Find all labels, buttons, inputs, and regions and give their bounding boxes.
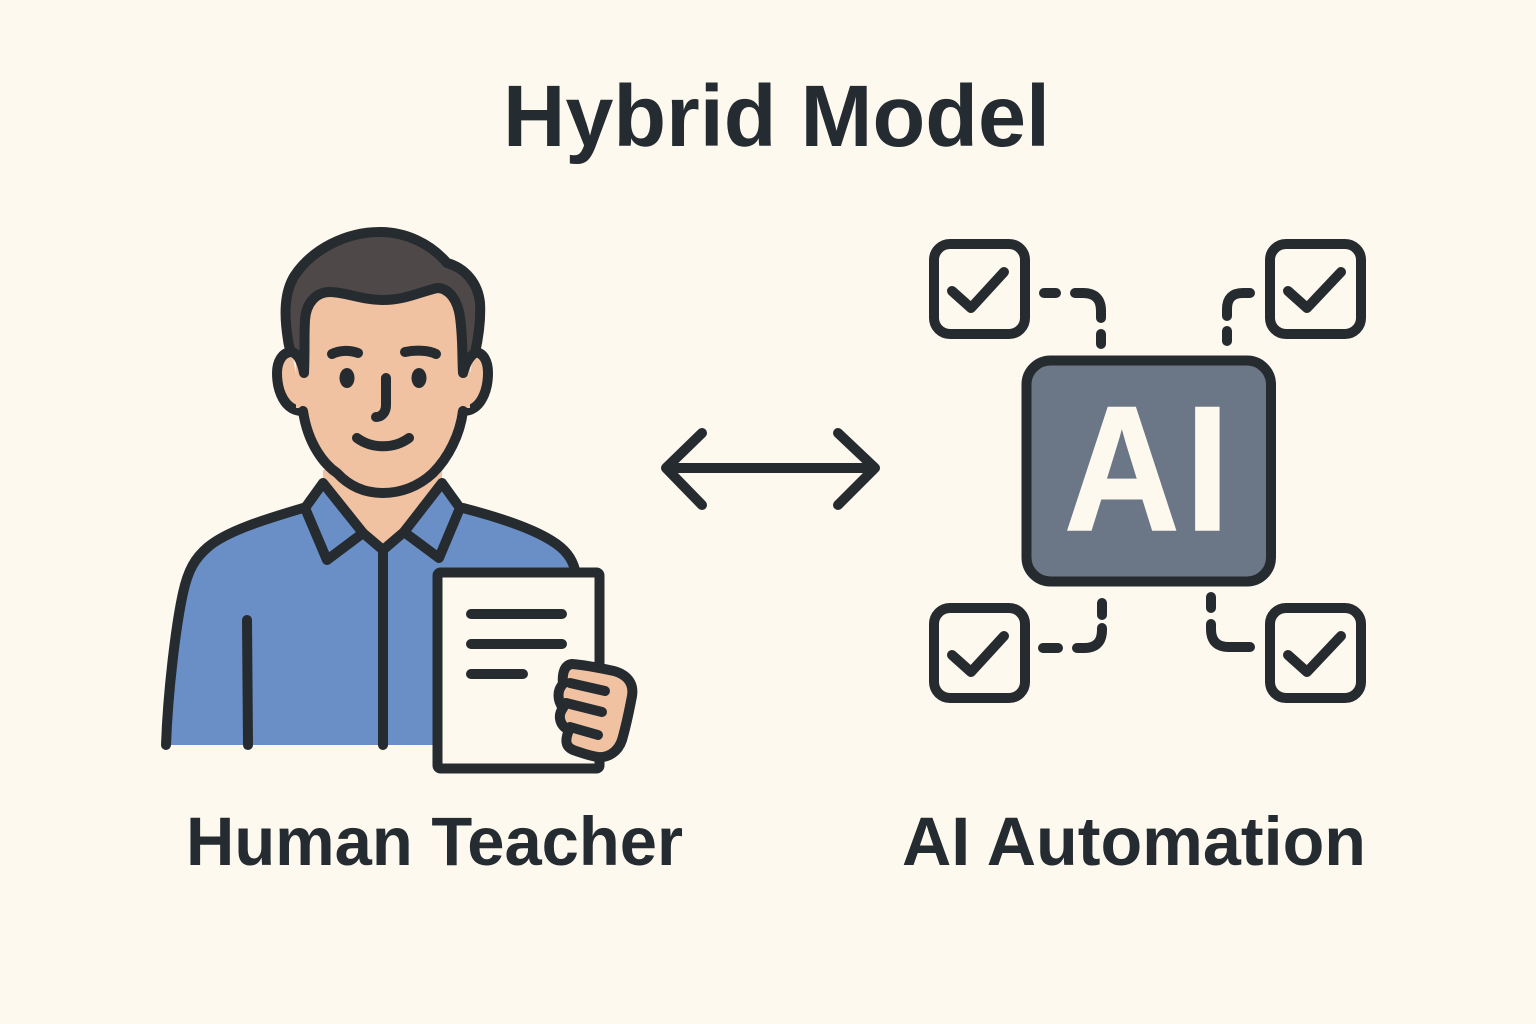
icon: human teacher: [166, 232, 632, 768]
hand: [558, 664, 632, 757]
left ear: [277, 352, 303, 411]
finger line 3: [570, 727, 598, 735]
mouth: [357, 438, 409, 446]
label: human teacher: Human Teacher: [186, 803, 683, 880]
face skin: [296, 288, 470, 493]
jaw line: [303, 411, 463, 493]
paper text line 3: [471, 669, 523, 679]
left eyebrow: [332, 351, 358, 354]
AI chip: [1026, 360, 1271, 582]
label: AI automation: AI Automation: [902, 803, 1366, 880]
connector top left: [1044, 293, 1101, 344]
checkbox bottom right: [1270, 608, 1361, 698]
checkbox top left: [934, 244, 1025, 334]
paper text line 2: [471, 639, 562, 649]
finger line 2: [566, 703, 602, 712]
connector bottom right: [1211, 597, 1250, 647]
icon: AI automation: [934, 244, 1361, 698]
right collar: [404, 483, 460, 558]
connector top right: [1227, 293, 1250, 341]
right eye: [412, 368, 426, 388]
sleeve line: [247, 620, 248, 745]
shirt placket: [378, 550, 388, 745]
left eye: [340, 368, 354, 388]
right ear: [463, 352, 488, 411]
double-headed arrow: [666, 433, 875, 505]
left collar: [305, 483, 363, 560]
neck: [323, 470, 442, 550]
AI letters: AI: [1064, 369, 1230, 568]
title: Hybrid Model: [503, 68, 1050, 165]
collar centre: [363, 532, 404, 550]
hair: [286, 232, 480, 373]
connector bottom left: [1043, 603, 1102, 648]
paper: [438, 572, 600, 768]
right eyebrow: [405, 351, 436, 354]
paper text line 1: [471, 609, 562, 619]
finger line 1: [570, 683, 605, 691]
shirt: [166, 508, 575, 745]
nose: [376, 378, 386, 417]
checkbox bottom left: [934, 608, 1025, 698]
checkbox top right: [1270, 244, 1361, 334]
shirt outline: [166, 508, 575, 745]
